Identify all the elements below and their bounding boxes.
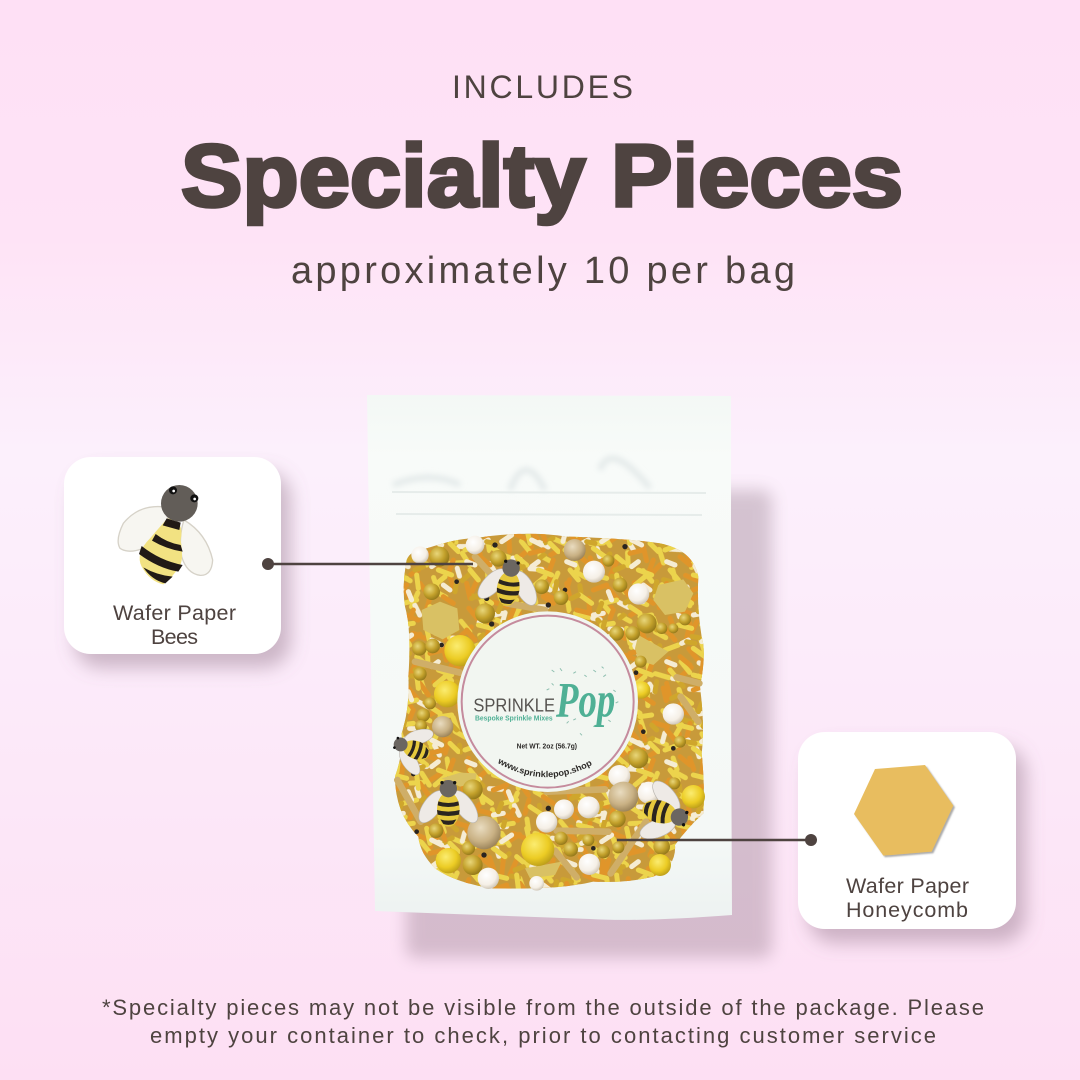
callout: wafer paper honeycomb card xyxy=(798,732,1016,929)
product bag xyxy=(367,395,779,964)
yellow beads xyxy=(434,635,705,876)
pearl beads xyxy=(411,536,684,891)
logo word pop: Pop xyxy=(555,672,615,728)
black nonpareils xyxy=(411,542,676,858)
card label: Honeycomb xyxy=(846,898,968,922)
footnote: empty your container to check, prior to contacting customer service xyxy=(150,1023,936,1048)
footnote: *Specialty pieces may not be visible from the outside of the package. Please xyxy=(102,995,984,1020)
bee pieces xyxy=(385,555,697,853)
logo word sprinkle: SPRINKLE xyxy=(473,695,555,716)
logo tagline: Bespoke Sprinkle Mixes xyxy=(475,714,553,723)
bag body xyxy=(367,395,732,920)
gold rods xyxy=(397,557,699,877)
icon: bee xyxy=(118,485,213,584)
card label xyxy=(846,874,969,922)
icon: hexagon xyxy=(854,765,953,856)
bag shadow xyxy=(406,490,772,958)
callout: wafer paper bees card xyxy=(64,457,281,654)
gold beads xyxy=(412,547,691,875)
title: Specialty Pieces xyxy=(181,126,903,225)
subtitle: approximately 10 per bag xyxy=(291,250,795,292)
net weight: Net WT. 2oz (56.7g) xyxy=(517,744,577,751)
logo confetti xyxy=(547,667,618,735)
zipper seal xyxy=(392,458,706,515)
arrow: bee pointer xyxy=(262,558,473,570)
footnote xyxy=(102,995,984,1048)
card label: Bees xyxy=(151,625,198,649)
heading: includes: INCLUDES xyxy=(452,69,633,105)
sticker label xyxy=(457,611,638,792)
sprinkle mix xyxy=(393,534,705,891)
arrow: honeycomb pointer xyxy=(617,834,817,846)
tan beads xyxy=(432,539,638,849)
card label: Wafer Paper xyxy=(113,601,236,625)
card label: Wafer Paper xyxy=(846,874,969,898)
hexagon pieces xyxy=(422,579,693,878)
card label xyxy=(113,601,236,649)
website url: www.sprinklepop.shop xyxy=(498,758,592,779)
